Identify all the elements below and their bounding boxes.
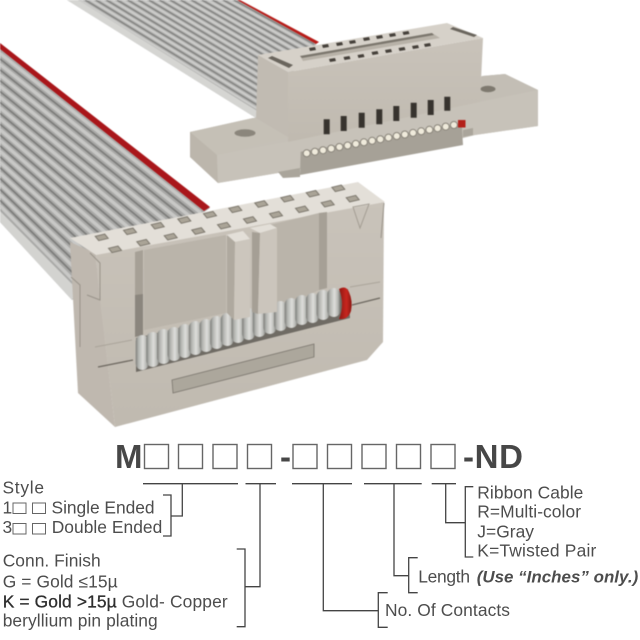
style legend: 1	[2, 497, 12, 517]
length legend: (Use “Inches” only.)	[477, 567, 639, 586]
connector finish legend: Conn. Finish	[3, 551, 101, 571]
recessed front panels	[144, 235, 226, 330]
character boxes	[144, 444, 455, 468]
triangle mark	[353, 204, 369, 228]
prefix M: M	[115, 438, 142, 475]
mounting holes	[234, 129, 256, 137]
lower connector	[70, 182, 385, 427]
front slots	[324, 97, 450, 134]
connector finish legend: G = Gold ≤15µ	[3, 572, 118, 592]
label recess	[172, 344, 314, 393]
red edge stripe	[237, 0, 319, 44]
ribbon bracket	[446, 484, 473, 557]
housing seam lines	[98, 298, 380, 367]
keying tabs	[226, 224, 277, 320]
connector finish legend: Gold- Copper	[122, 591, 228, 611]
housing	[70, 182, 385, 427]
ribbon cable legend: R=Multi-color	[477, 502, 581, 522]
style legend	[2, 477, 162, 537]
part number code	[115, 438, 523, 475]
body	[256, 23, 483, 142]
callout connector lines	[143, 484, 473, 627]
style legend: Single Ended	[52, 497, 154, 517]
top socket holes	[95, 185, 359, 253]
red pin 1 marker	[458, 120, 466, 128]
upper ribbon cable	[67, 0, 319, 118]
upper connector	[190, 23, 538, 183]
top pin holes	[309, 31, 431, 62]
red conductor	[339, 288, 352, 319]
vertical grooves	[135, 250, 143, 337]
length bracket	[394, 484, 418, 593]
cable coil crimp	[136, 288, 352, 372]
pin strip	[300, 120, 466, 175]
lower ribbon cable	[0, 43, 210, 300]
ribbon cable legend: K=Twisted Pair	[477, 541, 597, 561]
connector finish legend	[3, 551, 228, 631]
style bracket	[163, 484, 182, 536]
connector finish legend: beryllium pin plating	[3, 611, 158, 631]
contacts bracket	[323, 484, 388, 627]
style legend: 3	[2, 517, 12, 537]
ribbon cable legend	[477, 482, 597, 561]
number of contacts legend: No. Of Contacts	[385, 600, 510, 620]
red edge stripe	[0, 43, 210, 211]
style legend: Style	[2, 477, 44, 497]
finish bracket	[237, 484, 260, 627]
suffix ND: -ND	[463, 438, 523, 475]
illustration: connectors and ribbon cables	[0, 0, 538, 427]
style legend: Double Ended	[52, 517, 162, 537]
corner latch outlines	[71, 203, 384, 347]
flange	[190, 74, 538, 183]
tabs under flange	[278, 168, 300, 178]
ribbon cable legend: J=Gray	[477, 521, 534, 541]
connector finish legend: K = Gold >15µ	[3, 591, 117, 611]
length legend: Length	[418, 566, 470, 586]
length legend	[418, 566, 639, 586]
top slots	[268, 27, 477, 68]
ribbon cable legend: Ribbon Cable	[477, 482, 583, 502]
dash: -	[280, 438, 291, 475]
